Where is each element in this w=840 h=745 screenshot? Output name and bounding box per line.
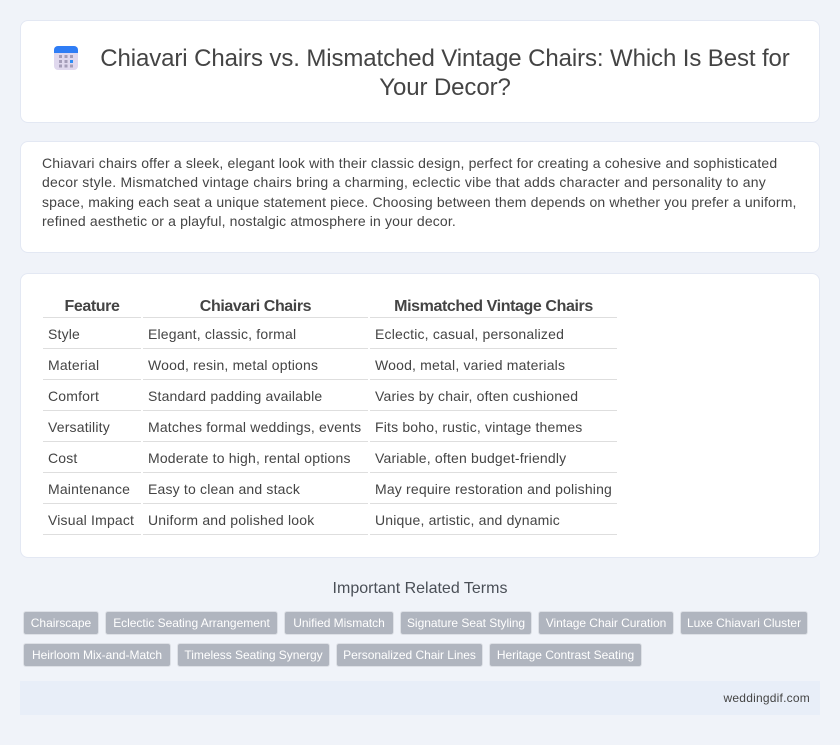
table rows: Matches formal weddings, events bbox=[148, 419, 361, 435]
table rows bbox=[43, 317, 617, 535]
title: Your Decor? bbox=[379, 74, 511, 101]
table rows: Wood, metal, varied materials bbox=[375, 357, 565, 373]
table rows: Variable, often budget-friendly bbox=[375, 450, 566, 466]
table rows: Comfort bbox=[48, 388, 99, 404]
table rows: Versatility bbox=[48, 419, 110, 435]
table rows: Cost bbox=[48, 450, 78, 466]
panel: description bbox=[20, 141, 820, 253]
panel: comparison table bbox=[20, 273, 820, 558]
related term tags: Heritage Contrast Seating bbox=[497, 648, 634, 662]
related term tags: Unified Mismatch bbox=[293, 616, 385, 630]
table rows: Maintenance bbox=[48, 481, 130, 497]
table rows: Unique, artistic, and dynamic bbox=[375, 512, 560, 528]
related term tags bbox=[23, 611, 808, 667]
title: Chiavari Chairs vs. Mismatched Vintage Chairs: Which Is Best for bbox=[100, 45, 790, 72]
table rows: Material bbox=[48, 357, 99, 373]
table rows: May require restoration and polishing bbox=[375, 481, 612, 497]
table rows: Style bbox=[48, 326, 80, 342]
related term tags: Signature Seat Styling bbox=[407, 616, 525, 630]
text block: description: refined aesthetic or a playful, nostalgic atmosphere in your decor. bbox=[42, 213, 456, 229]
text block: description: Chiavari chairs offer a sleek, elegant look with their classic design, perfect for creating a cohesive and sophisticated bbox=[42, 155, 777, 171]
table header row: Mismatched Vintage Chairs bbox=[394, 298, 593, 315]
panel: title header bbox=[20, 20, 820, 123]
text block: description: space, making each seat a unique statement piece. Choosing between them depends on whether you prefer a uniform, bbox=[42, 194, 797, 210]
table header row: Feature bbox=[64, 298, 120, 315]
related term tags: Heirloom Mix-and-Match bbox=[32, 648, 162, 662]
table header row bbox=[64, 298, 593, 315]
related term tags: Luxe Chiavari Cluster bbox=[687, 616, 801, 630]
title bbox=[100, 45, 790, 101]
text block: description: decor style. Mismatched vintage chairs bring a charming, eclectic vibe that adds character and personality to any bbox=[42, 174, 766, 190]
text block: description bbox=[42, 155, 797, 229]
table rows: Fits boho, rustic, vintage themes bbox=[375, 419, 582, 435]
table rows: Easy to clean and stack bbox=[148, 481, 300, 497]
related term tags: Personalized Chair Lines bbox=[343, 648, 476, 662]
related term tags: Vintage Chair Curation bbox=[546, 616, 666, 630]
table rows: Visual Impact bbox=[48, 512, 134, 528]
table rows: Standard padding available bbox=[148, 388, 322, 404]
footer source text: weddingdif.com bbox=[724, 691, 810, 705]
related term tags: Timeless Seating Synergy bbox=[184, 648, 323, 662]
comparison table bbox=[43, 298, 617, 535]
table rows: Eclectic, casual, personalized bbox=[375, 326, 564, 342]
related term tags: Chairscape bbox=[31, 616, 91, 630]
table rows: Uniform and polished look bbox=[148, 512, 314, 528]
table header row: Chiavari Chairs bbox=[200, 298, 311, 315]
table rows: Wood, resin, metal options bbox=[148, 357, 318, 373]
table rows: Moderate to high, rental options bbox=[148, 450, 351, 466]
table rows: Varies by chair, often cushioned bbox=[375, 388, 578, 404]
table rows: Elegant, classic, formal bbox=[148, 326, 296, 342]
heading: related terms: Important Related Terms bbox=[333, 580, 507, 597]
icon: calendar bbox=[54, 46, 78, 70]
footer bar bbox=[20, 681, 820, 715]
related term tags: Eclectic Seating Arrangement bbox=[113, 616, 270, 630]
